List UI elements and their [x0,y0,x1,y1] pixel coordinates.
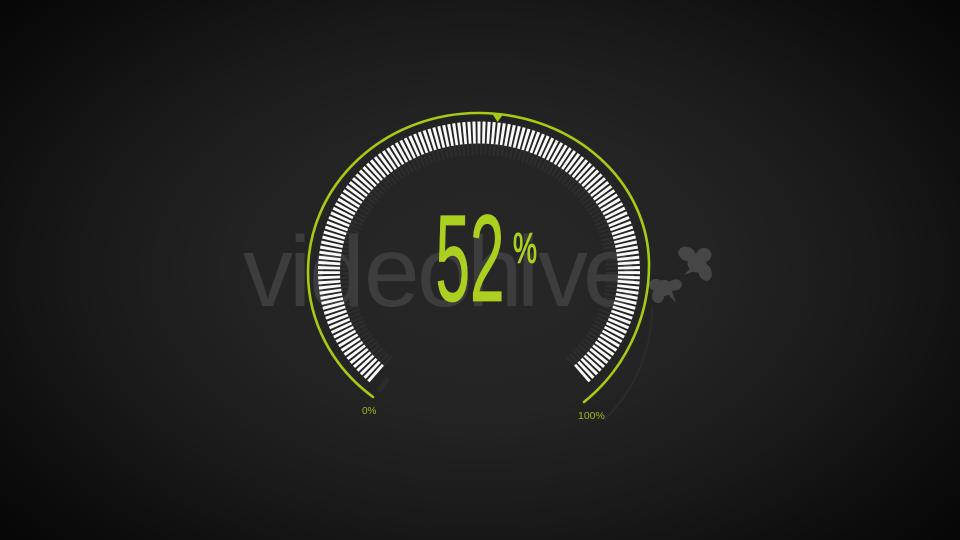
watermark wordmark: videohive [243,216,639,328]
value 52: 52 [436,191,504,328]
label 100%: 100% [578,410,605,422]
icon: watermark leaf logo [649,244,714,303]
faint inner tick ring [346,149,612,362]
percent sign: % [513,225,537,273]
icon: needle marker [492,114,503,122]
label 0%: 0% [362,406,377,417]
green progress arc [308,113,649,402]
gauge [308,113,652,420]
white tick ring [329,132,629,374]
faint ghost mark left [378,378,388,392]
faint ghost arc right [604,308,652,420]
